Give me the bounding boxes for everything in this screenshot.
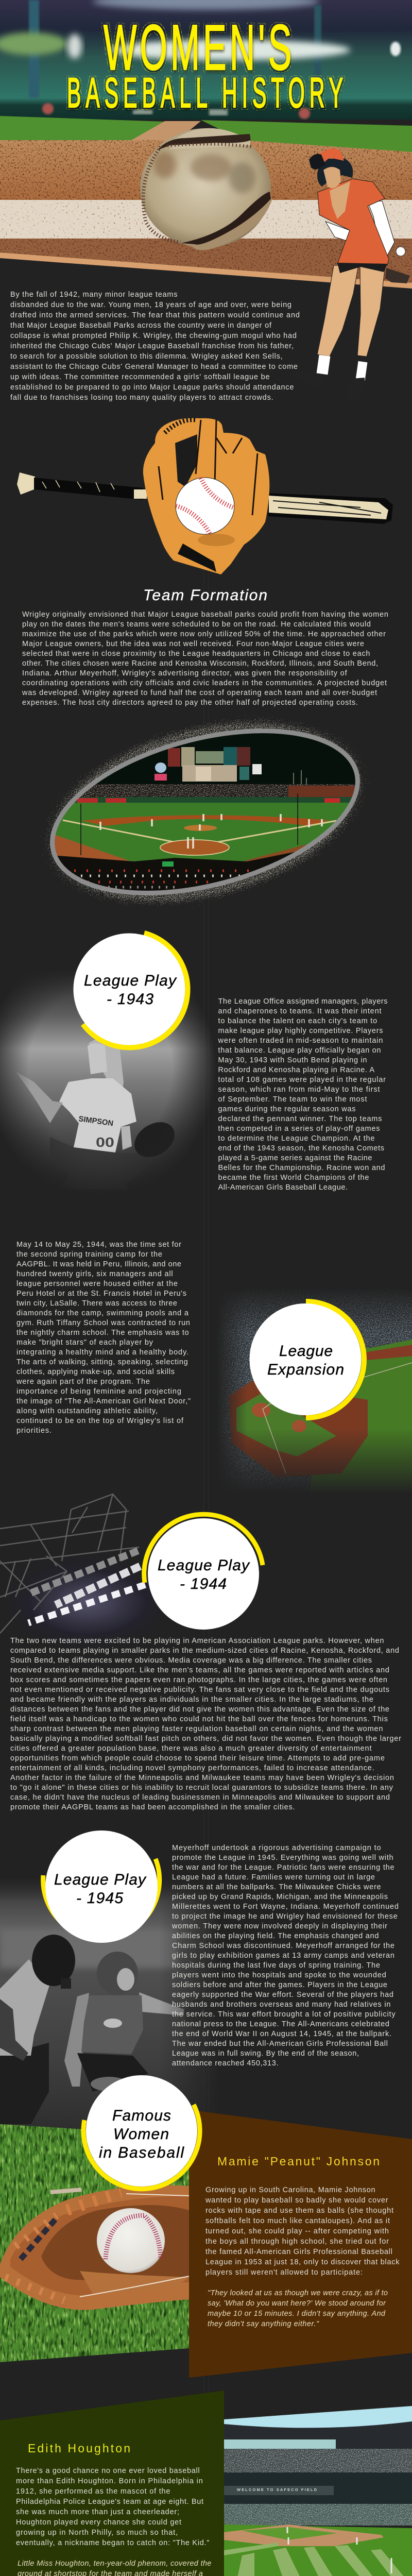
quote: Mamie Johnson: maybe 10 or 15 minutes. I didn't say anything. And xyxy=(208,2310,386,2318)
text block: league play 1944: distances between the fans and the player did not give the women this advantage. Even the size of the xyxy=(10,1705,389,1714)
photo: Safeco Field stadium: WELCOME TO SAFECO FIELD xyxy=(237,2487,317,2492)
photo: stadium floodlights xyxy=(0,1494,185,1656)
text block: intro: up with ideas. The committee recommended a girls' softball league be xyxy=(10,373,270,381)
text block: league play 1944: and became friendly with the players as individuals in the smaller cities. In the large stadiums, the xyxy=(10,1696,373,1704)
text block: team formation: expenses. The host city directors agreed to pay the other half of projected operating costs. xyxy=(22,699,358,707)
text block: league play 1944 xyxy=(10,1637,401,1811)
text block: league play 1945: attendance reached 450,313. xyxy=(172,2059,279,2067)
text block: league expansion: May 14 to May 25, 1944, was the time set for xyxy=(16,1241,181,1249)
text block: league play 1944: sharp contrast between the men playing faster regulation baseball on certain nights, and the women xyxy=(10,1725,383,1733)
text block: league play 1944: case, he didn't have the nucleus of leading businessmen in Minneapolis and Milwaukee to support and xyxy=(10,1793,390,1802)
text block: Mamie biography: Growing up in South Carolina, Mamie Johnson xyxy=(205,2186,375,2194)
text block: league expansion: Peru Hotel or at the St. Francis Hotel in Peru's xyxy=(16,1290,186,1298)
photo: baseball in glove on grass xyxy=(0,2112,189,2362)
title: WOMEN'S xyxy=(104,12,291,83)
text block: league play 1945 xyxy=(171,1844,399,2067)
text block: league play 1944: The two new teams were excited to be playing in American Association League parks. However, when xyxy=(10,1637,384,1645)
text block: league play 1943: games during the regular season was xyxy=(218,1105,355,1113)
text block: league play 1943: played a 5-game series against the Racine xyxy=(218,1154,372,1162)
text block: league play 1943: end of the 1943 season, the Kenosha Comets xyxy=(218,1144,384,1153)
photo: softball player sitting, black and white xyxy=(0,978,213,1182)
text block: league expansion: league personnel were housed either at the xyxy=(16,1280,178,1288)
text block: league expansion: make "bright stars" of each player by xyxy=(16,1338,153,1347)
text block: league play 1945: players went into the hospitals and spoke to the wounded xyxy=(172,1971,386,1979)
panel: Mamie Peanut Johnson xyxy=(189,2110,412,2378)
text block: Mamie biography: softballs felt too much like cantaloupes). And as it xyxy=(205,2217,390,2225)
text block: intro: disbanded due to the war. Young men, 18 years of age and over, were being xyxy=(10,301,291,309)
text block: Edith biography: Houghton played every chance she could get xyxy=(16,2518,181,2527)
callout: League Play 1945: - 1945 xyxy=(76,1890,123,1907)
text block: Edith biography: more than Edith Houghton. Born in Philadelphia in xyxy=(16,2477,203,2485)
text block: league play 1944: received extensive media support. Like the men's teams, all the games were reported with articles and xyxy=(10,1666,389,1674)
text block: league play 1945: League was in full swing. By the end of the season, xyxy=(172,2049,359,2058)
text block: team formation: maximize the use of the parks which were now only utilized 50% of the time. He approached other xyxy=(22,630,386,638)
photo: night game in oval frame with speckled halo xyxy=(40,714,370,908)
text block: league expansion: were again part of the program. The xyxy=(16,1378,150,1386)
callout: League Play 1944: - 1944 xyxy=(180,1575,227,1592)
quote: Edith Houghton xyxy=(18,2560,211,2576)
callout: League Play 1945 xyxy=(43,1831,160,1943)
text block: intro: established to be prepared to go into Major League parks should attendance xyxy=(10,383,294,392)
callout: Famous Women in Baseball xyxy=(83,2075,200,2189)
text block: league play 1944: basically playing a modified softball fast pitch on others, did not favor the women. Even though the larger xyxy=(10,1735,401,1743)
text block: league play 1945: promote the League in 1945. Everything was going well with xyxy=(172,1854,393,1862)
text block: league expansion: gym. Ruth Tiffany School was contracted to run xyxy=(16,1319,190,1327)
text block: league play 1943: that balance. League play officially began on xyxy=(218,1046,381,1055)
text block: team formation xyxy=(22,611,388,707)
text block: intro: drafted into the armed services. The fear that this pattern would continue and xyxy=(10,311,300,319)
text block: Edith biography: There's a good chance no one ever loved baseball xyxy=(16,2467,200,2475)
photo: aerial view of baseball stadium xyxy=(216,1288,412,1494)
text block: team formation: other. The cities chosen were Racine and Kenosha Wisconsin, Rockford, Illinois, and South Bend, xyxy=(22,659,378,668)
text block: team formation: play on the dates the men's teams were scheduled to be on the road. He calculated this would xyxy=(22,620,371,629)
panel: hero photo of baseball on the infield xyxy=(0,0,412,290)
photo: Safeco Field stadium xyxy=(224,2406,412,2576)
text block: Mamie biography: turned out, she could play -- after competing with xyxy=(205,2227,389,2235)
text block: Edith biography: 1912, she performed as the mascot of the xyxy=(16,2487,170,2496)
text block: league play 1945: girls to play exhibition games at 13 army camps and veteran xyxy=(172,1952,394,1960)
text block: league play 1943: were often traded in mid-season to maintain xyxy=(217,1037,383,1045)
text block: Edith biography: eventually, a nickname began to catch on: "The Kid." xyxy=(16,2539,209,2547)
heading: Mamie Peanut Johnson: Mamie "Peanut" Johnson xyxy=(217,2155,380,2168)
text block: league expansion: the nightly charm school. The emphasis was to xyxy=(16,1329,189,1337)
text block: intro: inherited the Chicago Cubs' Major League Baseball franchise from his father, xyxy=(10,342,294,350)
quote: Edith Houghton: Little Miss Houghton, ten-year-old phenom, covered the xyxy=(18,2560,211,2568)
text block: Mamie biography: wanted to play baseball so badly she would cover xyxy=(205,2196,388,2205)
text block: league play 1944: box scores and sometimes the papers even ran photographs. In the large cities, the games were often xyxy=(10,1676,387,1684)
text block: league play 1943: became the first World Champions of the xyxy=(218,1174,369,1182)
text block: league play 1945: numbers at all the ballparks. The Milwaukee Chicks were xyxy=(172,1883,381,1891)
text block: league play 1943: then competed in a series of play-off games xyxy=(218,1125,380,1133)
callout: League Expansion xyxy=(249,1301,364,1418)
text block: league play 1943: make league play highly competitive. Players xyxy=(218,1027,383,1035)
text block: league play 1945: women. They were now involved deeply in displaying their xyxy=(171,1922,387,1930)
text block: league play 1943: Belles for the Championship. Racine won and xyxy=(218,1164,385,1172)
text block: league expansion: continued to be on the top of Wrigley's list of xyxy=(16,1417,184,1425)
text block: league play 1945: picked up by Grand Rapids, Michigan, and the Minneapolis xyxy=(172,1893,388,1901)
icon: baseball bat xyxy=(17,472,393,524)
icon: white baseball xyxy=(176,478,234,534)
text block: Mamie biography: rocks with tape and use them as balls (she thought xyxy=(205,2207,393,2215)
heading: Team Formation: Team Formation xyxy=(143,587,267,604)
text block: Edith biography: she was much more than just a cheerleader; xyxy=(16,2508,179,2516)
text block: team formation: Indiana. Arthur Meyerhoff, Wrigley's advertising director, was given the responsibility of xyxy=(22,669,348,677)
text block: league play 1944: entertainment of all kinds, including novel symphony performances, failed to increase attendance. xyxy=(10,1764,374,1772)
text block: league expansion: priorities. xyxy=(16,1427,52,1435)
text block: league expansion: AAGPBL. It was held in Peru, Illinois, and one xyxy=(16,1260,181,1268)
text block: intro: that Major League Baseball Parks across the country were in danger of xyxy=(10,321,272,330)
text block: league play 1943: declared the pennant winner. The top teams xyxy=(218,1115,382,1123)
text block: league play 1945: The war ended but the All-American Girls Professional Ball xyxy=(172,2040,388,2048)
text block: league play 1945: Meyerhoff undertook a rigorous advertising campaign to xyxy=(172,1844,381,1852)
text block: team formation: was developed. Wrigley agreed to fund half the cost of operating each team and all over-budget xyxy=(22,689,377,697)
text block: league expansion: along with outstanding athletic ability, xyxy=(16,1407,158,1415)
text block: Edith biography xyxy=(16,2467,209,2547)
text block: league play 1945: soldiers before and after the games. Players in the League xyxy=(172,1981,387,1989)
text block: league expansion xyxy=(16,1241,191,1435)
text block: intro: assistant to the Chicago Cubs' General Manager to head a committee to come xyxy=(10,363,298,371)
callout: League Play 1944 xyxy=(144,1514,263,1630)
text block: team formation: coordinating operations with city officials and civic leaders in the communities. A projected budget xyxy=(22,679,387,687)
quote: Mamie Johnson: they didn't say anything either." xyxy=(208,2320,319,2328)
text block: league play 1945: Millerettes went to Fort Wayne, Indiana. Meyerhoff continued xyxy=(172,1903,399,1911)
text block: league play 1943: May 30, 1943 with South Bend playing in xyxy=(218,1056,367,1064)
text block: league play 1945: husbands and brothers overseas and many had relatives in xyxy=(172,2001,390,2009)
panel: Edith Houghton xyxy=(0,2391,224,2576)
text block: league play 1944: Another factor in the failure of the Minneapolis and Milwaukee teams may have been Wrigley's decision xyxy=(10,1774,394,1782)
text block: Edith biography: Philadelphia Police League's team at age eight. But xyxy=(16,2498,203,2506)
photo: softball player sitting, black and white: 00 xyxy=(96,1134,114,1150)
callout: League Play 1943: - 1943 xyxy=(107,991,153,1008)
text block: league play 1945: hospitals during the last five days of spring training. The xyxy=(172,1961,380,1970)
text block: league expansion: importance of being feminine and projecting xyxy=(16,1387,181,1396)
text block: league play 1945: to project the image he and Wrigley had envisioned for these xyxy=(172,1912,398,1921)
callout: League Expansion: Expansion xyxy=(267,1361,344,1378)
icon: bat behind glove and ball xyxy=(17,418,393,574)
text block: league play 1945: the war and for the League. Patriotic fans were ensuring the xyxy=(172,1863,394,1872)
text block: league play 1943: total of 108 games were played in the regular xyxy=(218,1076,386,1084)
text block: league play 1943: season, which ran from mid-May to the first xyxy=(218,1086,380,1094)
text block: Mamie biography: the famed All-American Girls Professional Baseball xyxy=(205,2248,392,2256)
text block: league expansion: clothes, applying make-up, and social skills xyxy=(16,1368,175,1376)
callout: League Play 1943: League Play xyxy=(84,972,177,989)
text block: intro: to search for a possible solution to this dilemma. Wrigley asked Ken Sells, xyxy=(10,352,283,361)
photo: umpire and catcher, black and white xyxy=(0,1875,221,2133)
callout: League Play 1943 xyxy=(73,933,188,1047)
title: BASEBALL HISTORY xyxy=(67,69,343,116)
title xyxy=(67,12,343,116)
text block: league play 1945: abilities on the playing field. The emphasis changed and xyxy=(172,1932,379,1940)
text block: Mamie biography: the boys all through high school, she tried out for xyxy=(205,2238,389,2246)
text block: league play 1944: field itself was a handicap to the women who could not hit the ball over the fences for homeruns. This xyxy=(10,1715,388,1723)
callout: League Expansion: League xyxy=(279,1343,333,1360)
text block: team formation: selected that were in close proximity to the League headquarters in Chicago and close to each xyxy=(22,650,370,658)
text block: Mamie biography xyxy=(205,2186,400,2277)
photo: softball player sitting, black and white: SIMPSON xyxy=(78,1114,114,1128)
text block: league play 1945: national press to the League. The All-Americans celebrated xyxy=(172,2020,389,2028)
text block: league play 1945: Charm School was discontinued. Meyerhoff arranged for the xyxy=(172,1942,394,1950)
text block: league play 1945: the service. This war effort brought a lot of positive publicity xyxy=(172,2010,396,2019)
text block: league play 1943: to determine the League Champion. At the xyxy=(218,1134,375,1143)
text block: team formation: Wrigley originally envisioned that Major League baseball parks could profit from having the women xyxy=(22,611,388,619)
text block: league play 1943: and chaperones to teams. It was their intent xyxy=(218,1007,381,1015)
quote: Mamie Johnson: "They looked at us as though we were crazy, as if to xyxy=(208,2289,388,2297)
text block: league expansion: diamonds for the camp, swimming pools and a xyxy=(16,1309,189,1317)
text block: league play 1944: compared to teams playing in smaller parks in the medium-sized cities of Racine, Kenosha, Rockford, and xyxy=(10,1647,399,1655)
text block: league play 1945: the end of World War II on August 14, 1945, at the ballpark. xyxy=(172,2030,391,2038)
heading: Edith Houghton: Edith Houghton xyxy=(28,2442,130,2455)
text block: league expansion: The arts of walking, sitting, speaking, selecting xyxy=(16,1358,188,1366)
callout: League Play 1945: League Play xyxy=(54,1871,147,1888)
callout: Famous Women in Baseball: Women xyxy=(113,2126,169,2143)
text block: league expansion: hundred twenty girls, six managers and all xyxy=(16,1270,173,1278)
text block: intro xyxy=(10,291,300,402)
text block: league expansion: the image of "The All-American Girl Next Door," xyxy=(16,1397,191,1405)
text block: league expansion: twin city, LaSalle. There was access to three xyxy=(16,1299,177,1308)
callout: Famous Women in Baseball: Famous xyxy=(112,2107,171,2124)
text block: league play 1943 xyxy=(217,997,387,1192)
text block: league play 1943: Rockford and Kenosha playing in Racine. A xyxy=(218,1066,374,1074)
text block: Edith biography: growing up in North Philly, so much so that, xyxy=(16,2529,178,2537)
quote: Mamie Johnson: say, 'What do you want here?' We stood around for xyxy=(208,2299,386,2308)
text block: league play 1944: promote their AAGPBL teams as had been accomplished in the smaller cities. xyxy=(10,1803,295,1811)
text block: league play 1944: not even mentioned or received negative publicity. The fans sat very close to the field and the dugouts xyxy=(10,1686,389,1694)
text block: league play 1944: South Bend, the differences were obvious. Media coverage was a big difference. The smaller cities xyxy=(10,1656,372,1665)
text block: team formation: Major League owners, but the idea was not well received. Four non-Major League cities were xyxy=(22,640,364,648)
text block: league play 1945: eagerly supported the War effort. Several of the players had xyxy=(172,1991,393,1999)
text block: league play 1943: The League Office assigned managers, players xyxy=(218,997,387,1006)
text block: league expansion: the second spring training camp for the xyxy=(16,1250,162,1259)
text block: intro: By the fall of 1942, many minor league teams xyxy=(10,291,177,299)
icon: leather glove xyxy=(143,418,269,574)
text block: intro: fall due to franchises losing too many quality players to attract crowds. xyxy=(10,394,273,402)
text block: league expansion: integrating a healthy mind and a healthy body. xyxy=(16,1348,188,1357)
text block: intro: collapse is what prompted Philip K. Wrigley, the chewing-gum mogul who had xyxy=(10,332,297,340)
text block: league play 1944: to "go it alone" in these cities or his inability to recruit local guarantors to subsidize teams there. In any xyxy=(10,1784,393,1792)
illustration: pin-up baseball player xyxy=(291,148,410,401)
text block: league play 1943: of September. The team to win the most xyxy=(218,1095,367,1104)
quote: Mamie Johnson xyxy=(208,2289,388,2328)
text block: Mamie biography: players still weren't allowed to participate: xyxy=(205,2268,363,2277)
text block: league play 1944: cities offered a greater population base, there was also a much greater diversity of entertainment xyxy=(10,1744,372,1753)
text block: league play 1943: to balance the talent on each city's team to xyxy=(218,1017,377,1025)
icon: worn baseball xyxy=(140,128,272,250)
text block: league play 1943: All-American Girls Baseball League. xyxy=(218,1183,348,1192)
callout: Famous Women in Baseball: in Baseball xyxy=(99,2144,184,2161)
text block: league play 1944: opportunities from which people could choose to spend their leisure time. Attempts to add pre-game xyxy=(10,1754,385,1762)
text block: league play 1945: League had a future. Families were turning out in large xyxy=(172,1873,375,1882)
text block: Mamie biography: League in 1953 at just 18, only to discover that black xyxy=(205,2258,400,2266)
callout: League Play 1944: League Play xyxy=(158,1557,250,1574)
